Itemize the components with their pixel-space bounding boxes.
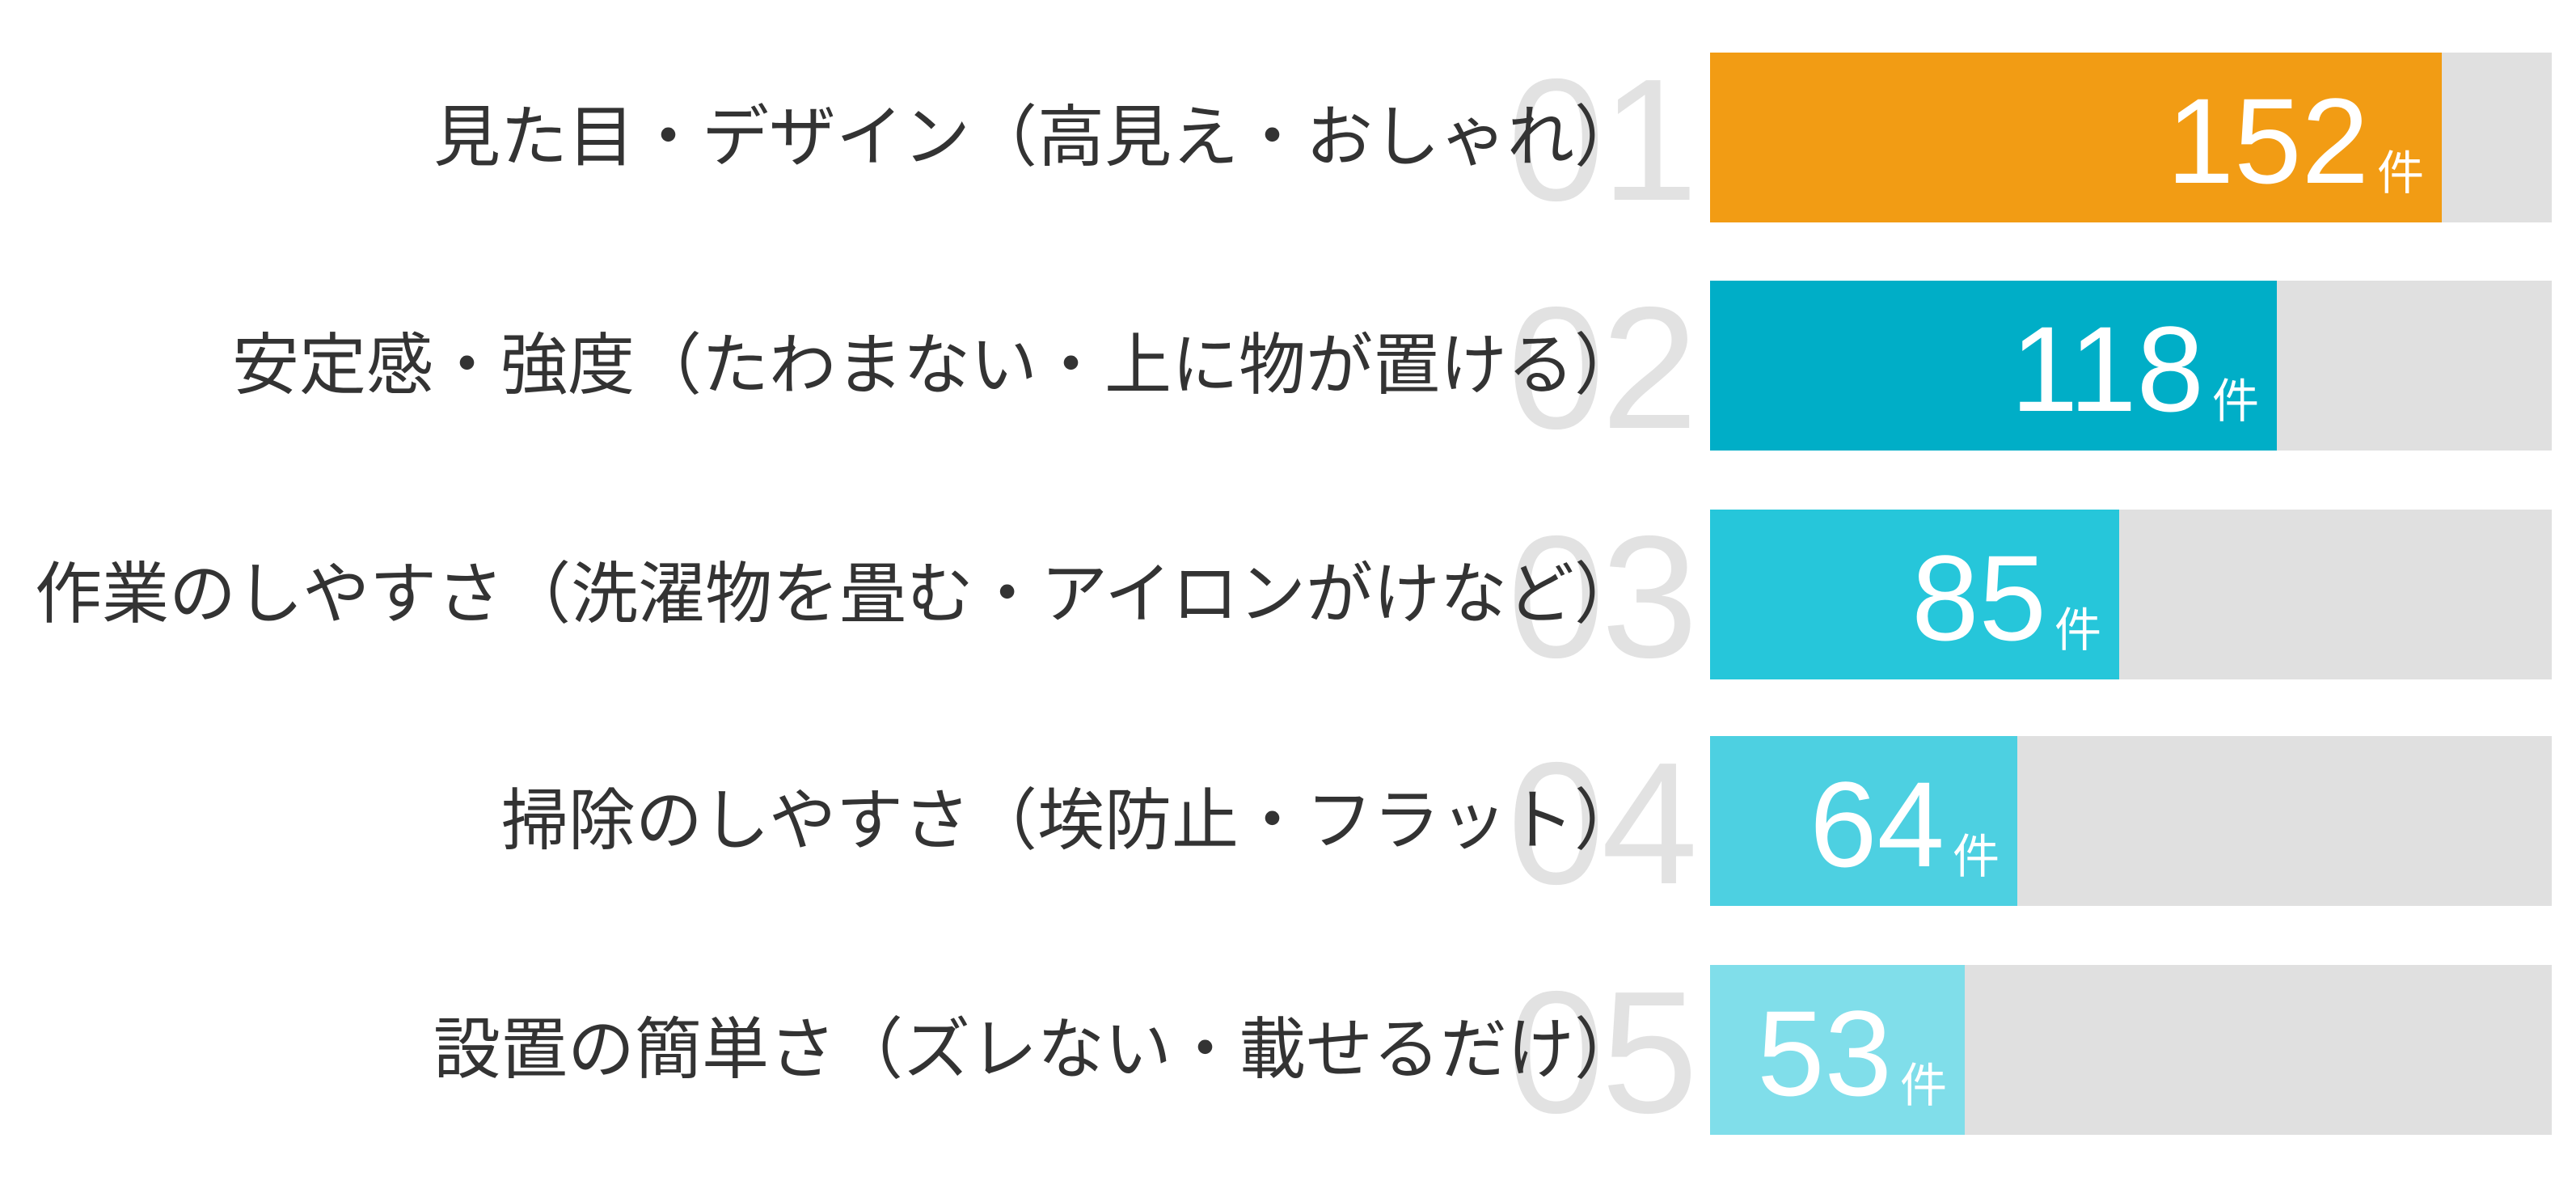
bar 1: 152件 (1710, 53, 2442, 222)
bar track 1 (1710, 53, 2552, 222)
bar 3: 85件 (1710, 510, 2119, 679)
bar 5: 53件: 53 (1757, 985, 1892, 1121)
bar 4: 64件: 64 (1810, 756, 1945, 892)
rank number 05: 05 (1508, 954, 1695, 1149)
bar 3: 85件: 85 (1911, 530, 2046, 666)
rank number 01: 01 (1508, 42, 1695, 237)
row 5 (433, 954, 2552, 1149)
row 2 (232, 270, 2552, 465)
rank number 04: 04 (1508, 726, 1695, 920)
bar 5: 53件: 件 (1900, 1060, 1947, 1112)
label 1: 見た目・デザイン（高見え・おしゃれ） (433, 99, 1641, 175)
label 4: 掃除のしやすさ（埃防止・フラット） (501, 783, 1641, 858)
row 4 (501, 726, 2552, 920)
bar 2: 118件: 件 (2212, 375, 2259, 428)
rank number 02: 02 (1508, 270, 1695, 465)
row 3 (35, 499, 2552, 694)
bar track 5 (1710, 965, 2552, 1135)
bar 2: 118件: 118 (2011, 301, 2204, 437)
label 5: 設置の簡単さ（ズレない・載せるだけ） (433, 1012, 1641, 1087)
label 2: 安定感・強度（たわまない・上に物が置ける） (232, 328, 1641, 403)
bar 2: 118件 (1710, 281, 2277, 451)
label 3: 作業のしやすさ（洗濯物を畳む・アイロンがけなど） (35, 556, 1641, 632)
rank number 03: 03 (1508, 499, 1695, 694)
bar 4: 64件: 件 (1953, 831, 2000, 883)
bar 5: 53件 (1710, 965, 1965, 1135)
bar track 2 (1710, 281, 2552, 451)
bar 3: 85件: 件 (2054, 604, 2101, 657)
bar track 3 (1710, 510, 2552, 679)
bar 4: 64件 (1710, 736, 2017, 906)
bar 1: 152件: 件 (2377, 147, 2424, 200)
row 1 (433, 42, 2552, 237)
bar 1: 152件: 152 (2167, 73, 2369, 209)
bar track 4 (1710, 736, 2552, 906)
